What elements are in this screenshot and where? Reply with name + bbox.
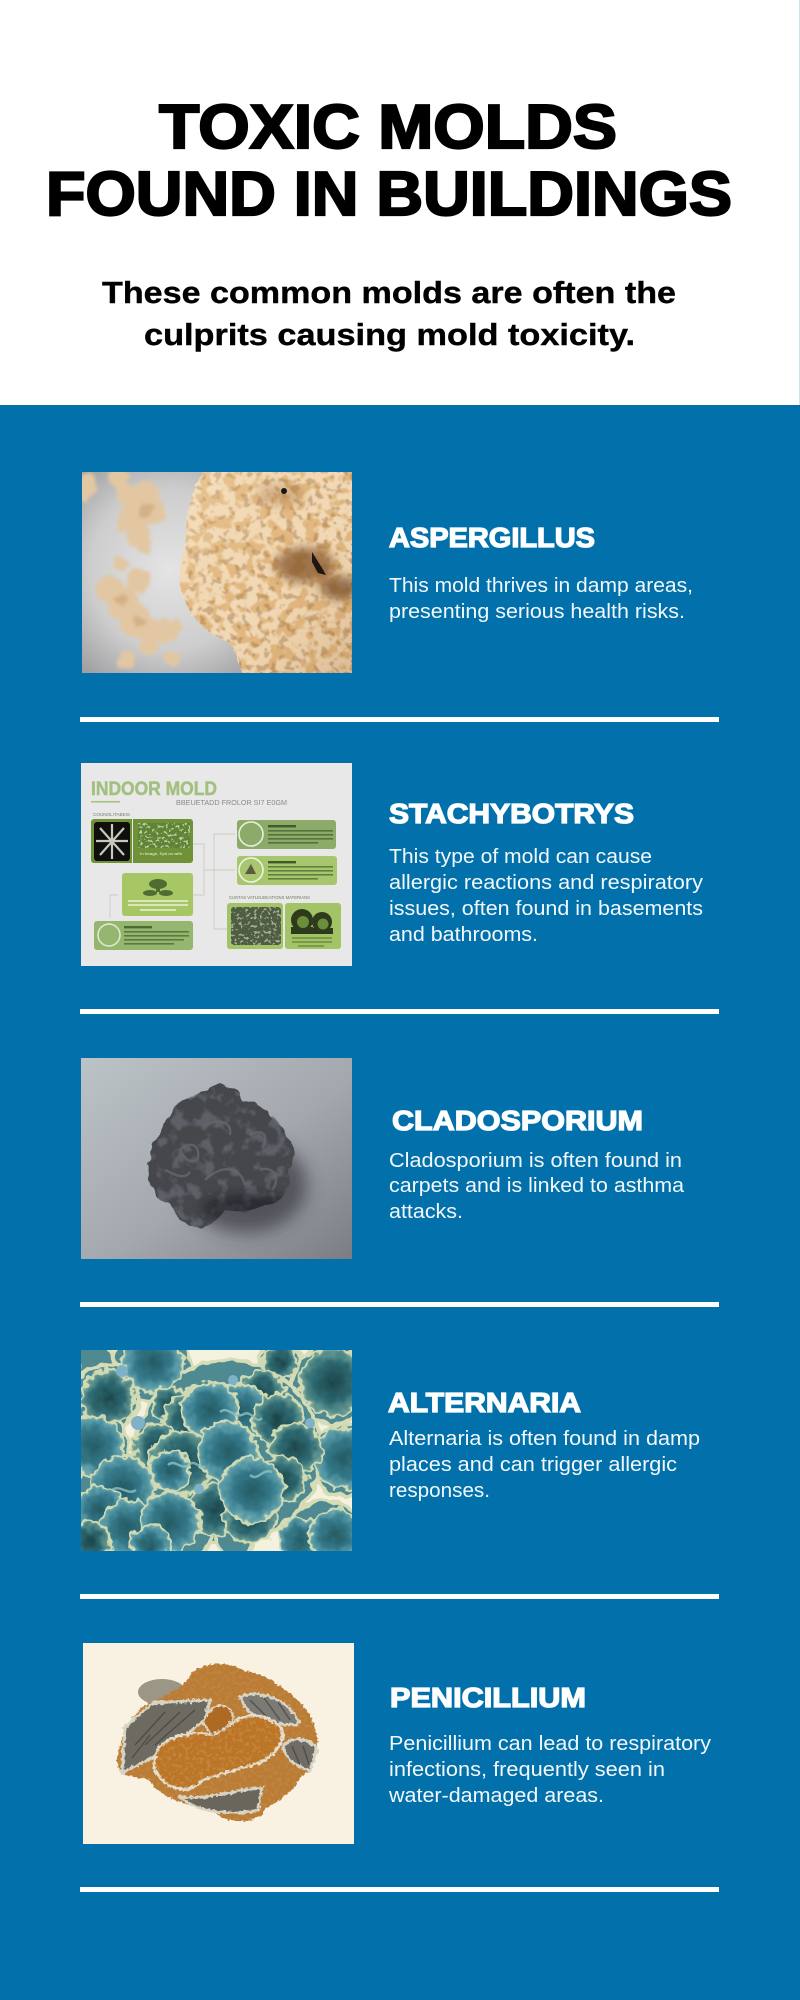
text: cladosporium: CLADOSPORIUM: [392, 1105, 643, 1136]
text: cladosporium: attacks.: [389, 1201, 463, 1223]
text: stachybotrys: issues, often found in basements: [389, 898, 703, 920]
text: cladosporium: Cladosporium is often found in: [389, 1150, 682, 1172]
image: penicillium mold: [83, 1643, 354, 1844]
text: aspergillus: ASPERGILLUS: [389, 522, 595, 553]
image: indoor mold infographic: CUNTAS VATLEUBCATIONS MATERIANS: [229, 895, 310, 900]
text: stachybotrys: [389, 798, 703, 946]
text: alternaria: places and can trigger allergic: [389, 1454, 677, 1476]
image: aspergillus mold: [75, 468, 360, 673]
image: indoor mold infographic: INDOOR MOLD: [91, 779, 217, 800]
text: stachybotrys: and bathrooms.: [389, 924, 538, 946]
text: aspergillus: This mold thrives in damp areas,: [389, 575, 693, 597]
text: stachybotrys: allergic reactions and respiratory: [389, 872, 703, 894]
text: penicillium: Penicillium can lead to respiratory: [389, 1733, 711, 1755]
text: aspergillus: presenting serious health risks.: [389, 601, 685, 623]
header background: [0, 0, 800, 405]
text: cladosporium: carpets and is linked to asthma: [389, 1175, 685, 1197]
image: alternaria mold: [81, 1350, 352, 1551]
text: penicillium: [388, 1682, 711, 1807]
panel: blue mold list background: [0, 405, 800, 2000]
text: aspergillus: [389, 522, 693, 623]
text: cladosporium: [389, 1105, 685, 1223]
subtitle: [102, 275, 676, 352]
title: FOUND IN BUILDINGS: [46, 160, 732, 229]
image: indoor mold infographic: BBEUETADD FROLOR SI7 E0GM: [176, 798, 287, 807]
text: penicillium: water-damaged areas.: [388, 1785, 604, 1807]
text: stachybotrys: STACHYBOTRYS: [389, 798, 634, 829]
text: penicillium: PENICILLIUM: [390, 1682, 586, 1713]
title: [46, 93, 732, 229]
title: TOXIC MOLDS: [159, 93, 617, 162]
text: stachybotrys: This type of mold can cause: [389, 846, 652, 868]
text: penicillium: infections, frequently seen in: [389, 1759, 665, 1781]
text: alternaria: ALTERNARIA: [388, 1387, 581, 1418]
image: indoor mold infographic: In forage, Spit on with: [140, 851, 182, 856]
image: indoor mold infographic: COUNOLITABEIS: [93, 812, 130, 817]
image: indoor mold infographic: [81, 763, 352, 966]
image: cladosporium mold: [81, 1058, 352, 1259]
subtitle: These common molds are often the: [102, 275, 676, 310]
text: alternaria: [388, 1387, 700, 1502]
subtitle: culprits causing mold toxicity.: [144, 317, 635, 352]
text: alternaria: Alternaria is often found in damp: [389, 1428, 700, 1450]
text: alternaria: responses.: [389, 1480, 490, 1502]
